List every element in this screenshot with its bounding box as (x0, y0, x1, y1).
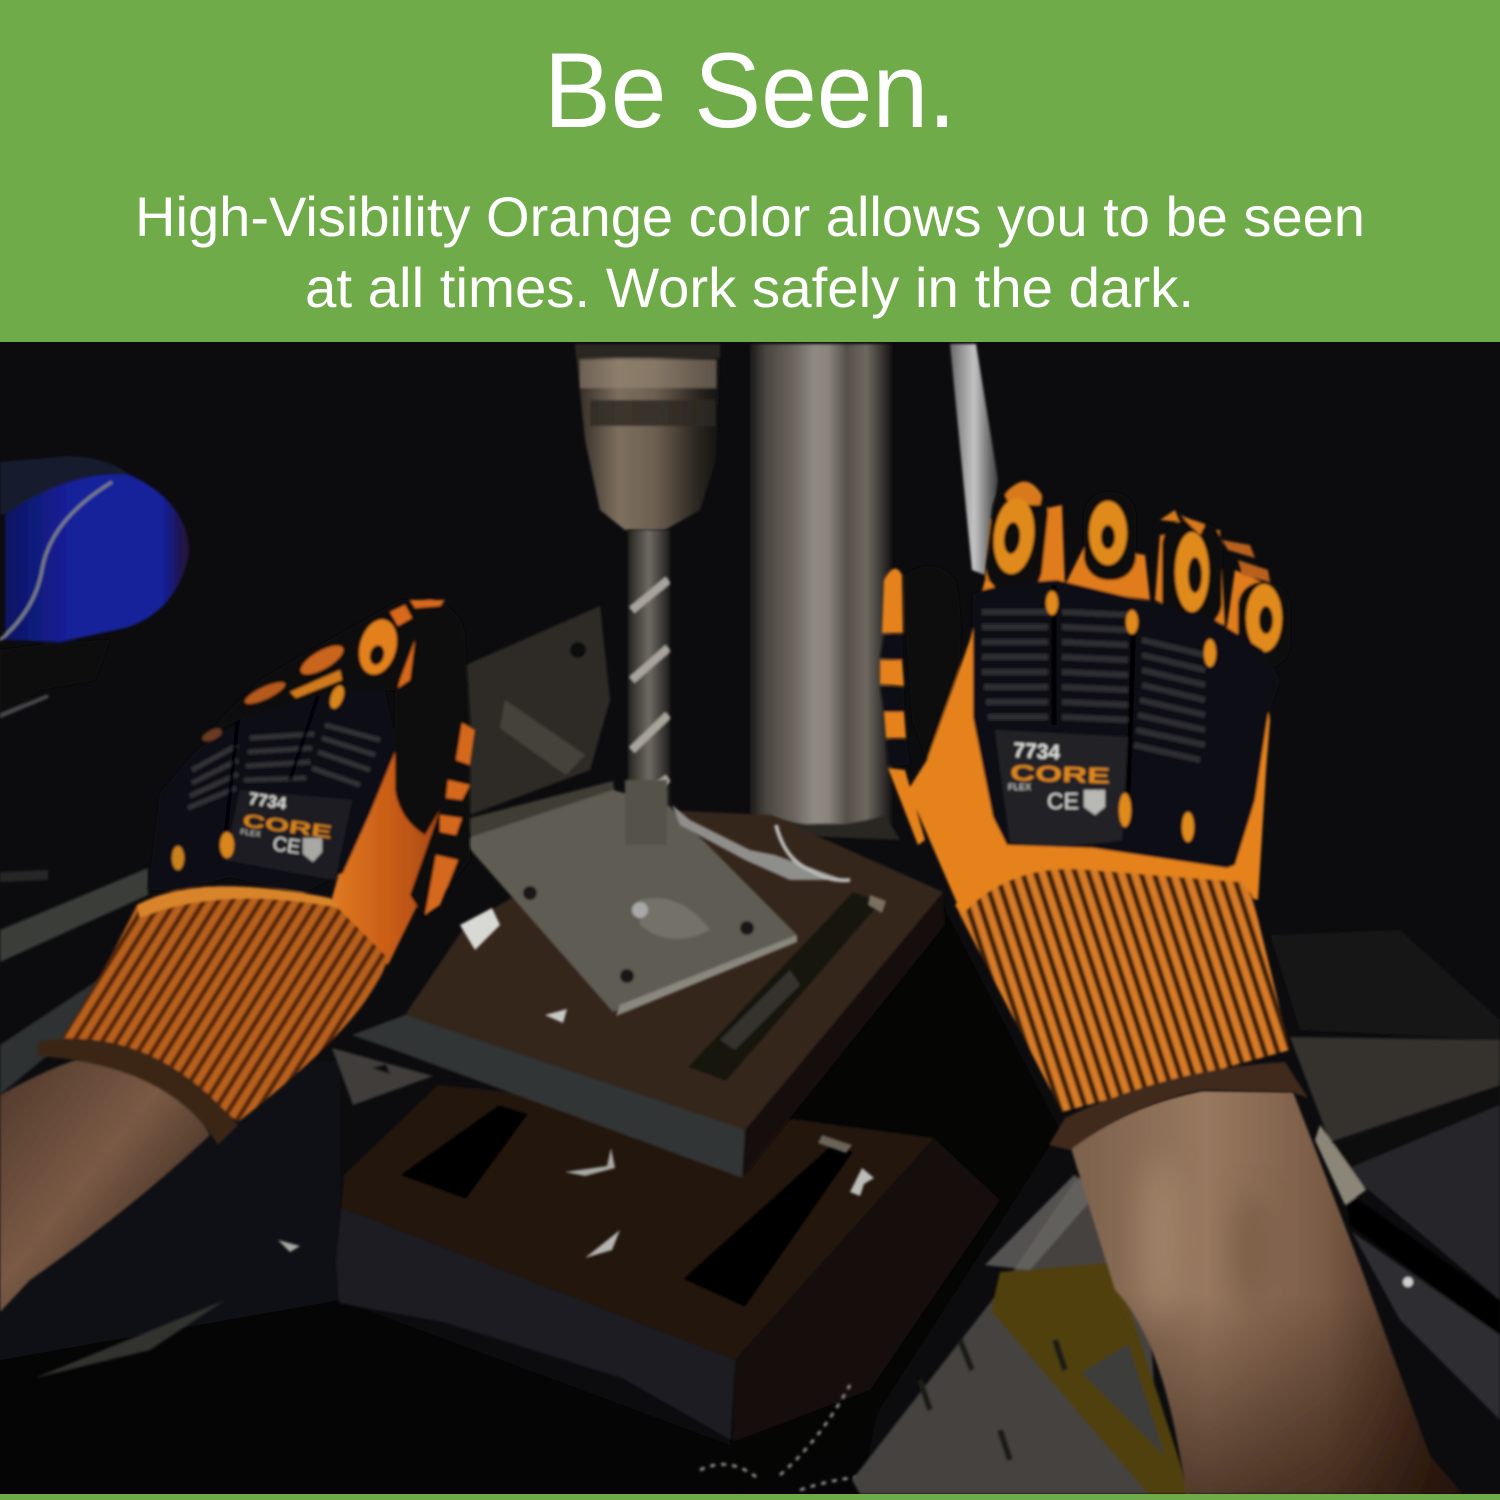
cuff (62, 886, 388, 1122)
black floor wedge behind table (730, 900, 1060, 1495)
subtitle (135, 185, 1365, 319)
pad dots (1046, 591, 1058, 615)
drill bit (628, 530, 670, 840)
left glove: CORE (241, 810, 333, 842)
subtitle: at all times. Work safely in the dark. (305, 256, 1194, 319)
drill column (750, 344, 900, 840)
right glove: CE (1047, 788, 1079, 814)
diamond plate bottom right (852, 930, 1500, 1494)
right glove: FLEX (1008, 782, 1031, 792)
steel workpiece plate (462, 780, 797, 1016)
lever (950, 344, 998, 575)
bottom black shadow (0, 1300, 880, 1495)
left glove (38, 598, 475, 1145)
debris at right (1270, 930, 1500, 1040)
metal shavings (35, 805, 900, 1490)
bottom green rule (0, 1494, 1500, 1500)
right arm (1070, 1091, 1463, 1494)
black thumb (385, 598, 470, 918)
logo text: 7734 (247, 789, 288, 813)
title: Be Seen. (544, 30, 956, 150)
left glove: FLEX (240, 827, 262, 839)
photo: gloved hands at drill press (0, 342, 1500, 1495)
logo panel (225, 790, 352, 880)
logo text: 7734 (1013, 739, 1061, 764)
bluish floor at lower left (0, 1060, 340, 1360)
cuff (955, 858, 1290, 1112)
left glove: CE (271, 833, 302, 859)
subtitle: High-Visibility Orange color allows you to be seen (135, 185, 1365, 248)
angle bracket (432, 606, 610, 815)
right glove: CORE (1010, 760, 1111, 788)
orange back (908, 580, 1270, 910)
logo panel (995, 730, 1128, 846)
drill chuck (575, 344, 720, 530)
orange palm (330, 745, 440, 965)
right glove (880, 482, 1308, 1150)
finger knuckles (205, 600, 430, 735)
back pad (973, 580, 1280, 868)
left arm (0, 1051, 210, 1312)
lower drill base (336, 1085, 1000, 1442)
back pad (148, 683, 397, 893)
header band (0, 0, 1500, 342)
orange finger bases (985, 505, 1285, 660)
drill table top (332, 810, 945, 1178)
knuckle pads (984, 483, 1050, 597)
blue ear protection (0, 456, 190, 720)
metal rods at left (0, 868, 148, 1095)
black thumb (905, 566, 961, 760)
